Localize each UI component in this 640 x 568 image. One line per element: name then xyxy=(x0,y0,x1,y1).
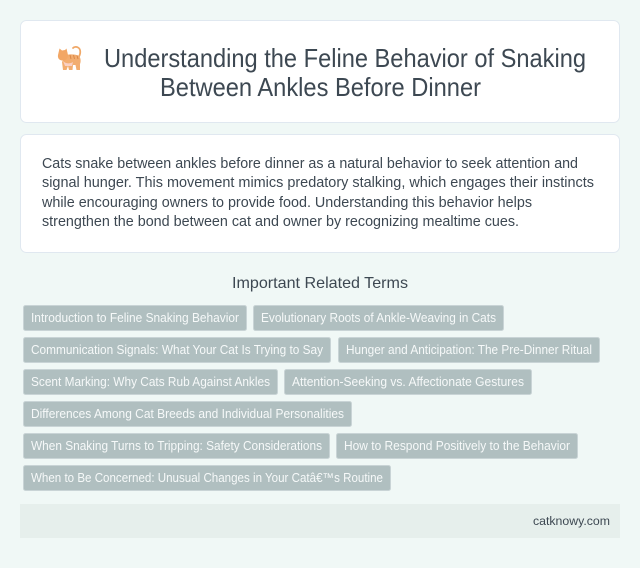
tag: Evolutionary Roots of Ankle-Weaving in Cats xyxy=(261,311,496,325)
tag xyxy=(24,434,330,458)
tag: Introduction to Feline Snaking Behavior xyxy=(31,311,239,325)
heading: related terms: Important Related Terms xyxy=(232,275,408,292)
tag: Hunger and Anticipation: The Pre-Dinner Ritual xyxy=(346,343,592,357)
tag xyxy=(336,434,578,458)
tag: When to Be Concerned: Unusual Changes in Your Catâ€™s Routine xyxy=(31,471,383,485)
tag xyxy=(254,306,504,330)
text block: description: strengthen the bond between cat and owner by recognizing mealtime cues. xyxy=(42,214,519,230)
tag: Scent Marking: Why Cats Rub Against Ankles xyxy=(31,375,270,389)
tag xyxy=(24,306,246,330)
text block: description: while encouraging owners to provide food. Understanding this behavior helps xyxy=(41,195,532,211)
footer xyxy=(20,504,620,538)
tag: Differences Among Cat Breeds and Individual Personalities xyxy=(31,407,344,421)
tag group: related terms xyxy=(24,306,600,490)
text block: description: signal hunger. This movement mimics predatory stalking, which engages their instincts xyxy=(42,175,594,191)
tag xyxy=(24,466,390,490)
footer: catknowy.com xyxy=(533,514,610,528)
panel: title card xyxy=(20,20,620,122)
tag: Communication Signals: What Your Cat Is Trying to Say xyxy=(31,343,324,357)
tag xyxy=(24,370,278,394)
text block: description: Cats snake between ankles before dinner as a natural behavior to seek attention and xyxy=(42,156,578,172)
tag xyxy=(338,338,600,362)
title: Understanding the Feline Behavior of Snaking xyxy=(104,43,586,73)
text block: description xyxy=(41,156,594,230)
tag: How to Respond Positively to the Behavior xyxy=(344,439,570,453)
tag: Attention-Seeking vs. Affectionate Gestures xyxy=(292,375,524,389)
tag xyxy=(24,402,352,426)
title: Between Ankles Before Dinner xyxy=(160,72,481,102)
panel: description xyxy=(20,134,620,252)
tag: When Snaking Turns to Tripping: Safety Considerations xyxy=(31,439,322,453)
tag xyxy=(284,370,532,394)
icon: cat xyxy=(58,47,81,70)
tag xyxy=(24,338,330,362)
title xyxy=(104,43,586,102)
